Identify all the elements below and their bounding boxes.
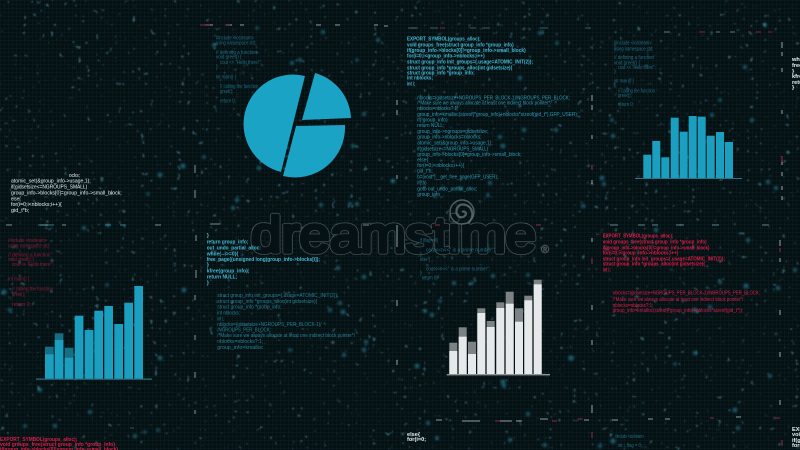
pie slice: bottom right: [283, 125, 345, 177]
code block: white bottom centre: for(i=0;: [407, 437, 426, 443]
code block: dim prime number snippet: cout<<n<<" is a prime number";: [426, 266, 490, 272]
code block: dim program top right: [614, 41, 656, 108]
code block: dim prime number snippet: else {: [420, 257, 430, 263]
bar chart: top right teal: [635, 116, 742, 179]
code block: dim red left: return 0;: [12, 302, 31, 308]
code block: dim blue bottom centre-left indented: nblocks=(gidsetsize+NGROUPS_PER_BLOCK-1)/: [217, 322, 322, 328]
code block: dim program near pie chart: [216, 35, 262, 105]
code block: top centre blue: struct group_info *group_info;: [407, 71, 475, 77]
pie slice: large left: [244, 75, 305, 172]
code block: centre right blue indented: if(!b): [417, 180, 427, 186]
pie slice: top right: [302, 73, 351, 120]
code block: red right indented: [613, 291, 760, 314]
code block: dim blue bottom centre-left indented: /*Make sure we always allocate at least one indirect block pointer*/: [217, 333, 355, 339]
code block: white clipped right edge: }: [792, 69, 795, 75]
icon: watermark spiral: [450, 200, 474, 224]
code block: top centre blue: int nblocks;: [407, 76, 433, 82]
code block: dim prime number snippet: cout<<n<<" is a prime number";: [426, 247, 495, 253]
code block: centre right blue indented: gid_t*b;: [417, 169, 433, 175]
code block: centre right blue indented: if(gidsetsize<=NGROUPS_SMALL): [417, 146, 488, 152]
code block: dim program top right: void greet() {: [614, 60, 640, 66]
code block: dim red left: void greet() {: [8, 257, 34, 263]
code block: red right: struct group_info *groups_alloc(int gidsetsize){: [603, 262, 706, 268]
code block: white left: [11, 173, 122, 214]
code block: dim red left: cout << "Hello there!";: [12, 262, 54, 268]
code block: top centre blue: int i;: [407, 81, 415, 87]
code block: dim red left: // defining a function: [8, 253, 50, 259]
bar chart: centre white and gray: [447, 280, 550, 375]
code block: dim red left: greet();: [12, 292, 25, 298]
code block: red right: if(group_info->blocks[0]!=group_info->small_block): [603, 245, 710, 251]
code block: white bottom centre: else{: [407, 432, 421, 438]
code block: centre right blue indented: group_info->nblocks=nblocks;: [417, 135, 482, 141]
code block: centre right blue indented: group_info=kmalloc(sizeof(*group_info)+nblocks*sizeof(gid_t*),GFP_USER);: [417, 112, 579, 118]
code block: dim program top right: // calling the function: [618, 88, 655, 94]
code block: centre right blue indented: goto out_undo_partial_alloc;: [417, 186, 478, 192]
code block: centre right blue indented: group_info->ngroups=gidsetsize;: [417, 129, 489, 135]
code block: dim program near pie chart: using namespace std;: [216, 41, 256, 47]
code block: centre right blue indented: for(i=0;i<nblocks;i++){: [417, 163, 464, 169]
pie chart: [244, 73, 351, 177]
code block: red right: int i;: [603, 267, 611, 273]
code block: red right: for(i=0;i<group_info->nblocks;i++): [603, 251, 679, 257]
code block: blue bottom centre-left: free_page((unsigned long)group_info->blocks[i]);: [207, 257, 320, 263]
code block: dim blue bottom centre-left indented: struct group_info init_groups={.usage=ATOMIC_INIT(2)};: [217, 293, 339, 299]
code block: centre right blue indented: else{: [417, 157, 428, 163]
code block: white left: atomic_set(&group_info->usage,1);: [11, 179, 91, 185]
code block: blue bottom centre-left: kfree(group_info);: [207, 269, 250, 275]
code block: red right indented: group_info=kmalloc(sizeof(*group_info)+nblocks*sizeof(gid_t*));: [613, 308, 744, 314]
code block: red right indented: nblocks=nblocks?:1;: [613, 303, 654, 309]
watermark: dreamstime: dreamstime: [251, 207, 536, 263]
code block: blue bottom centre-left: return group_info;: [207, 240, 249, 246]
watermark: dreamstime: dreamstime: [251, 207, 536, 263]
code block: blue bottom centre-left: out_undo_partial_alloc:: [207, 246, 261, 252]
code block: centre right blue indented: nblocks=nblocks?:1;: [417, 106, 459, 112]
code block: dim blue bottom centre-left indented: int i;: [217, 316, 225, 322]
code block: white bottom centre: [407, 432, 426, 443]
code block: dim prime number snippet: return 0;: [422, 275, 438, 281]
code block: dim program near pie chart: }: [216, 65, 218, 71]
code block: dim program near pie chart: void greet() {: [216, 55, 242, 61]
code block: dim program top right: using namespace std;: [614, 46, 654, 52]
code block: dim program top right: }: [614, 69, 616, 75]
code block: dim bottom right: #include <iostream>: [615, 434, 644, 440]
code block: white left: for(i=0;i<nblocks;i++){: [11, 202, 62, 208]
code block: centre right blue indented: nblocks=(gidsetsize+NGROUPS_PER_BLOCK-1)/NGROUPS_PER_BLOCK;: [417, 96, 570, 102]
watermark: dreamstime: ®: [541, 244, 549, 256]
code block: white clipped right edge: [791, 57, 800, 91]
code block: red bottom left: EXPORT_SYMBOL(groups_alloc);: [0, 437, 77, 443]
code block: dim program near pie chart: // defining a function: [216, 50, 257, 56]
code block: dim red left: [8, 238, 54, 308]
code block: top centre blue: if(group_info->blocks[0]!=group_info->small_block): [407, 48, 526, 54]
code block: red bottom left: void groups_free(struct group_info *group_info): [0, 442, 115, 448]
code block: white left: group_info->blocks[0]=group_info->small_block;: [11, 191, 122, 197]
code block: centre right blue indented: return NULL;: [417, 123, 445, 129]
code block: dim program top right: cout << "Hello there!";: [618, 65, 656, 71]
code block: dim blue bottom centre-left indented: [217, 293, 355, 351]
code block: dim program near pie chart: #include <iostream>: [216, 35, 254, 41]
code block: red right indented: nblocks=(gidsetsize+NGROUPS_PER_BLOCK-1)/NGROUPS_PER_BLOCK;: [613, 291, 760, 297]
code block: white left: else{: [11, 196, 21, 202]
code block: red right: EXPORT_SYMBOL(groups_alloc);: [603, 234, 673, 240]
code block: dim blue bottom centre-left indented: nblocks=nblocks?:1;: [217, 339, 264, 345]
code block: blue bottom centre-left: [206, 233, 320, 286]
code block: dim program top right: // defining a function: [614, 55, 654, 61]
code block: white clipped right edge: }: [792, 85, 795, 91]
code block: dim program near pie chart: // calling the function: [220, 84, 258, 90]
code block: white left: if(gidsetsize<=NGROUPS_SMALL): [11, 185, 87, 191]
code block: white left: ocks;: [69, 173, 80, 179]
code block: centre right blue indented: [417, 96, 579, 198]
code block: dim program top right: int main() {: [614, 79, 634, 85]
code block: white clipped bottom right: [792, 427, 800, 449]
code block: dim program top right: return 0;: [618, 102, 634, 108]
code block: red right: [603, 234, 725, 273]
code block: centre right blue indented: if(!group_info): [417, 117, 448, 123]
code block: centre right blue indented: /*Make sure we always allocate at least one indirect block pointer*/: [417, 101, 552, 107]
code block: top centre blue: void groups_free(struct group_info *group_info): [407, 42, 514, 48]
code block: centre right blue indented: atomic_set(&group_info->usage,1);: [417, 141, 493, 147]
code block: dim prime number snippet: if (flag==0): [420, 238, 438, 244]
code block: dim program near pie chart: cout << "Hello there!";: [220, 60, 262, 66]
code block: blue bottom centre-left: return NULL;: [207, 275, 238, 281]
code block: dim prime number snippet: }: [420, 271, 422, 277]
code block: dim red left: #include <iostream>: [8, 238, 47, 244]
code block: dim bottom right: int i, flag = 0;: [618, 443, 642, 449]
code block: dim red left: int main() {: [8, 277, 29, 283]
code block: dim program top right: greet();: [618, 93, 632, 99]
code block: top centre blue: for(i=0;i<group_info->nblocks;i++): [407, 54, 485, 60]
code block: centre right blue indented: group_info: [417, 192, 440, 198]
code block: dim prime number snippet: }: [420, 252, 422, 258]
code block: dim program near pie chart: greet();: [220, 89, 234, 95]
code block: red right: struct group_info init_groups={.usage=ATOMIC_INIT(2)};: [603, 256, 725, 262]
code block: dim blue bottom centre-left indented: /NGROUPS_PER_BLOCK;: [217, 327, 271, 333]
bar chart: bottom left teal: [36, 286, 152, 380]
code block: dim prime number snippet: [420, 238, 495, 281]
code block: dim program near pie chart: return 0;: [220, 99, 236, 105]
code block: red right: void groups_free(struct group_info *group_info): [603, 240, 707, 246]
code block: dim blue bottom centre-left indented: int nblocks;: [217, 311, 240, 317]
code block: white left: gid_t*b;: [11, 208, 30, 214]
vertical dashed scan lines: [195, 42, 782, 446]
code block: dim blue bottom centre-left indented: struct group_info *group_info;: [217, 305, 282, 311]
code block: top centre blue: EXPORT_SYMBOL(groups_alloc);: [407, 36, 481, 42]
code block: blue bottom centre-left: }: [207, 262, 210, 268]
code block: top centre blue: struct group_info *groups_alloc(int gidsetsize){: [407, 65, 513, 71]
code block: blue bottom centre-left: }: [207, 280, 210, 286]
code block: centre right blue indented: b=(void*)__get_free_page(GFP_USER);: [417, 175, 499, 181]
code block: top centre blue: [407, 36, 533, 87]
code block: blue bottom centre-left: }: [207, 233, 210, 239]
code block: dim program top right: #include <iostream>: [614, 41, 652, 47]
code block: dim red left: // calling the function: [12, 286, 53, 292]
code block: red right indented: /*Make sure we always allocate at least one indirect block pointer*/: [613, 297, 744, 303]
code block: dim blue bottom centre-left indented: struct group_info *groups_alloc(int gidsetsize){: [217, 299, 317, 305]
code block: blue bottom centre-left: while(--i>=0){: [206, 251, 239, 257]
code block: dim program near pie chart: int main() {: [216, 75, 236, 81]
code block: centre right blue indented: group_info->blocks[0]=group_info->small_block;: [417, 152, 522, 158]
code block: red bottom left: [0, 437, 118, 450]
code block: dim red left: using namespace std;: [8, 243, 50, 249]
code block: dim blue bottom centre-left indented: group_info=kmalloc: [217, 345, 263, 351]
code block: dim bottom right: [615, 434, 644, 449]
code block: top centre blue: struct group_info init_groups={.usage=ATOMIC_INIT(2)};: [407, 60, 533, 66]
